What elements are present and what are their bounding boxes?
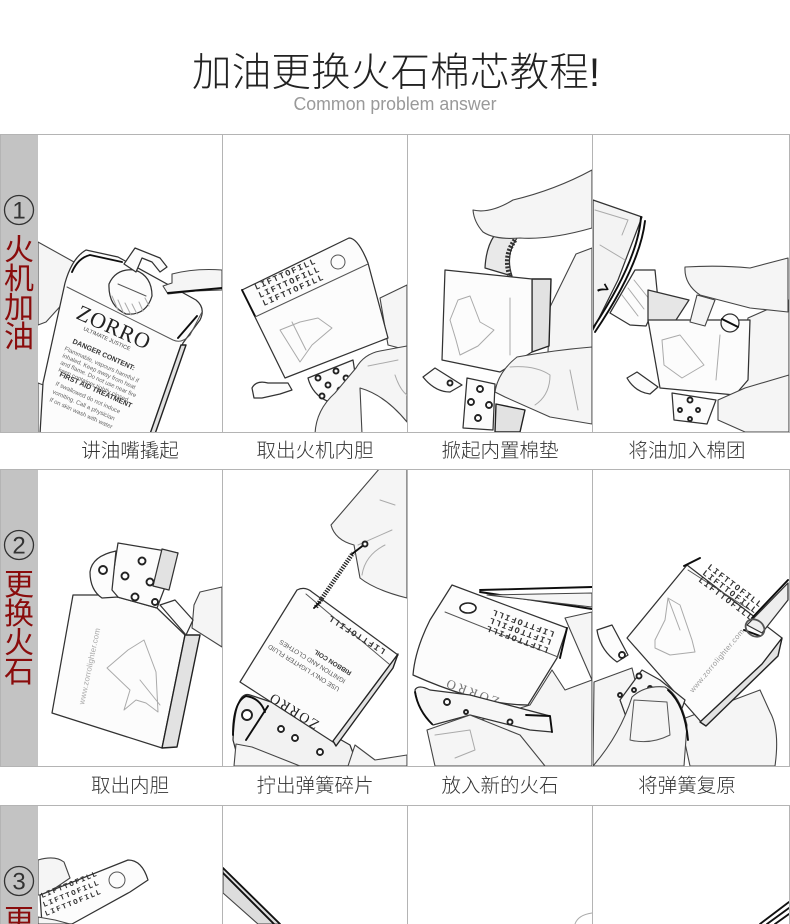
stamped case text (upside down): ZORRO xyxy=(268,689,322,731)
lift to fill stamp inverted: LIFTTOFILL xyxy=(490,606,556,639)
sidebar: step 1: 油 xyxy=(4,321,34,354)
illustration: remove insert: www.zorrolighter.com xyxy=(77,627,102,706)
lighter fluid label text: Flammable, vapours harmful if xyxy=(63,346,140,385)
lift to fill stamp inverted: LIFTTOFILL xyxy=(484,622,550,655)
captions: row 2 xyxy=(91,775,736,797)
lift to fill stamp: LIFTTOFILL xyxy=(696,575,756,624)
illustration: restore spring xyxy=(593,558,788,766)
sidebar: step 2: 石 xyxy=(4,656,34,689)
illustration: remove insert xyxy=(52,543,222,748)
illustration: insert new flint xyxy=(413,585,592,766)
captions: row 1: 掀起内置棉垫 xyxy=(441,440,559,462)
sidebar: step 1: 机 xyxy=(4,263,34,296)
lift to fill stamp: LIFTTOFILL xyxy=(253,256,318,293)
grid: row 1 borders xyxy=(0,134,790,432)
illustration: add oil to cotton: 7 xyxy=(593,282,611,297)
sidebar: step 3: 3 xyxy=(12,868,26,896)
lift to fill stamp inverted xyxy=(447,610,554,701)
sidebar: step 1 xyxy=(1,135,38,432)
stamped case text (upside down): USE ONLY LIGHTER FLUID xyxy=(267,642,341,692)
stamped case text (upside down): LIFTTOFILL xyxy=(325,612,388,656)
sidebar: step 2: 火 xyxy=(4,627,34,660)
sidebar: step 1: 1 xyxy=(12,198,26,224)
lift to fill stamp xyxy=(40,872,101,916)
spring tool xyxy=(316,553,353,607)
lift to fill stamp: LIFTTOFILL xyxy=(705,562,765,611)
lighter fluid label text: keep container tightly closed xyxy=(57,367,129,404)
illustration: remove lighter insert xyxy=(242,238,407,434)
captions: row 1 xyxy=(81,440,746,462)
lighter fluid label text: DANGER CONTENT: xyxy=(71,338,136,372)
illustration: restore spring: www.zorrolighter.com xyxy=(687,627,746,695)
stamped case text (upside down) xyxy=(267,612,388,731)
lift to fill stamp inverted: LIFTTOFILL xyxy=(487,614,553,647)
lighter fluid label text xyxy=(50,306,150,428)
lighter fluid label text: ULTIMATE JUSTICE xyxy=(82,326,131,353)
sidebar: step 2 xyxy=(1,470,38,766)
lift to fill stamp inverted: ZORRO xyxy=(444,676,501,709)
lift to fill stamp: LIFTTOFILL xyxy=(261,272,326,309)
captions: row 1: 将油加入棉团 xyxy=(628,440,746,462)
grid: row 2 borders xyxy=(0,470,790,766)
grid: row 3 borders xyxy=(0,806,790,924)
captions: row 2: 拧出弹簧碎片 xyxy=(256,775,374,797)
illustration: step 3 first panel xyxy=(38,858,148,924)
lift to fill stamp: LIFTTOFILL xyxy=(44,889,104,919)
sidebar: step 1: 加 xyxy=(4,292,34,325)
illustration: pull out spring debris xyxy=(233,468,407,766)
stamped case text (upside down): RIBBON COIL xyxy=(313,648,353,676)
illustration: step 3 tweezers xyxy=(223,868,280,924)
lighter fluid label text: inhaled. Keep away from heat xyxy=(61,353,136,391)
illustration: lift cotton pad xyxy=(423,170,592,432)
subtitle: Common problem answer xyxy=(294,93,496,114)
sidebar: step 2: 换 xyxy=(4,598,34,631)
captions: row 2: 放入新的火石 xyxy=(441,775,559,797)
lift to fill stamp: LIFTTOFILL xyxy=(40,871,100,901)
lighter fluid label text: If on skin wash with water xyxy=(48,397,113,431)
tool xyxy=(747,583,788,633)
lighter fluid label text: ZORRO xyxy=(73,300,154,354)
captions: row 2: 取出内胆 xyxy=(91,775,169,797)
lighter fluid label text: FIRST AID TREATMENT xyxy=(58,371,133,410)
lighter fluid label text: If swallowed do not induce xyxy=(54,381,122,416)
lift to fill stamp: LIFTTOFILL xyxy=(42,880,102,910)
captions: row 1: 讲油嘴撬起 xyxy=(81,440,179,462)
stamped case text (upside down): IGNITION AND CLOTHES xyxy=(278,637,347,684)
sidebar: step 1: 火 xyxy=(4,234,34,267)
sidebar: step 2: 2 xyxy=(12,532,26,560)
illustration: step 3 third panel corner xyxy=(575,913,592,924)
illustration: step 3 tool xyxy=(760,902,789,924)
captions: row 2: 将弹簧复原 xyxy=(638,775,736,797)
title: 加油更换火石棉芯教程! xyxy=(192,51,600,95)
illustration: pry up oil nozzle xyxy=(38,242,222,434)
sidebar: step 2: 更 xyxy=(4,569,34,602)
lighter fluid label text: vomiting. Call a physician xyxy=(51,389,115,422)
lighter fluid label text: and flame. Do not use near fire xyxy=(59,360,137,400)
illustration: add oil to cotton xyxy=(593,200,789,432)
sidebar: step 3 xyxy=(1,806,38,924)
captions: row 1: 取出火机内胆 xyxy=(256,440,374,462)
lift to fill stamp: LIFTTOFILL xyxy=(700,568,760,617)
lift to fill stamp: LIFTTOFILL xyxy=(257,264,322,301)
